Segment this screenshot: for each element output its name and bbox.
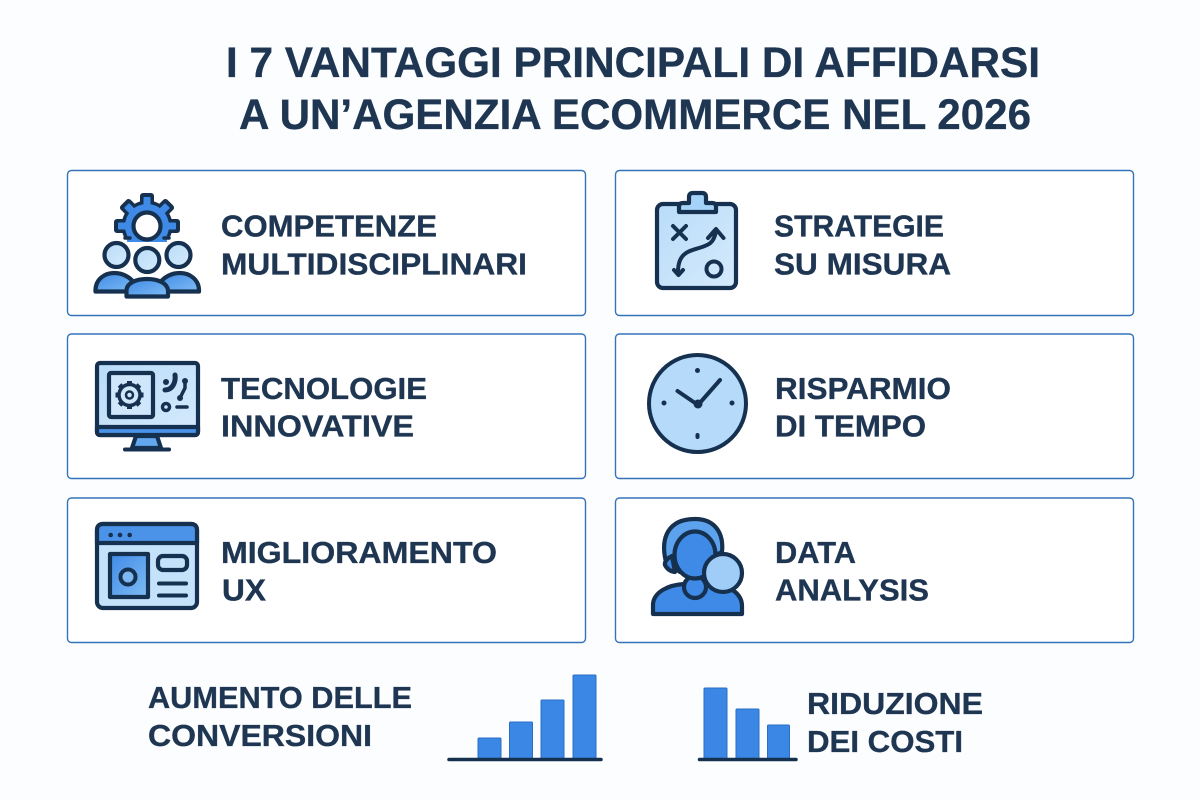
riduzione dei costi label: RIDUZIONE <box>807 686 983 721</box>
label: TECNOLOGIE <box>221 371 427 406</box>
panel: strategie su misura <box>616 170 1134 316</box>
label: DATA <box>775 535 856 570</box>
icon: person with headset <box>653 519 742 614</box>
icon: browser window <box>97 524 197 608</box>
panel: data analysis <box>616 498 1134 642</box>
label: SU MISURA <box>774 246 951 282</box>
label <box>775 371 951 444</box>
label <box>221 371 427 444</box>
icon: clipboard plan <box>657 193 736 288</box>
title: A UN’AGENZIA ECOMMERCE NEL 2026 <box>239 91 1031 139</box>
panel: competenze multidisciplinari <box>68 170 586 316</box>
icon: team with gear <box>95 193 199 296</box>
label: STRATEGIE <box>774 208 944 244</box>
icon: monitor with gear <box>97 363 198 450</box>
panel: miglioramento ux <box>68 498 586 642</box>
label <box>775 535 929 608</box>
label: UX <box>222 572 266 608</box>
label: RISPARMIO <box>775 371 951 406</box>
panel: tecnologie innovative <box>68 334 586 478</box>
aumento delle conversioni label: CONVERSIONI <box>148 718 372 753</box>
title <box>226 39 1040 139</box>
label: COMPETENZE <box>221 208 437 244</box>
label <box>774 208 951 282</box>
label: INNOVATIVE <box>221 408 414 444</box>
bar chart: increasing conversions <box>449 675 601 760</box>
riduzione dei costi label <box>807 686 983 759</box>
aumento delle conversioni label: AUMENTO DELLE <box>148 680 412 715</box>
riduzione dei costi label: DEI COSTI <box>807 724 963 759</box>
label: MULTIDISCIPLINARI <box>221 246 527 282</box>
title: I 7 VANTAGGI PRINCIPALI DI AFFIDARSI <box>226 39 1040 87</box>
label <box>221 535 497 608</box>
icon: clock <box>649 355 746 452</box>
label <box>221 208 527 282</box>
label: DI TEMPO <box>775 408 926 444</box>
label: MIGLIORAMENTO <box>221 535 497 570</box>
panel: risparmio di tempo <box>616 334 1134 478</box>
aumento delle conversioni label <box>148 680 412 753</box>
label: ANALYSIS <box>775 572 929 608</box>
bar chart: decreasing costs <box>700 688 796 760</box>
